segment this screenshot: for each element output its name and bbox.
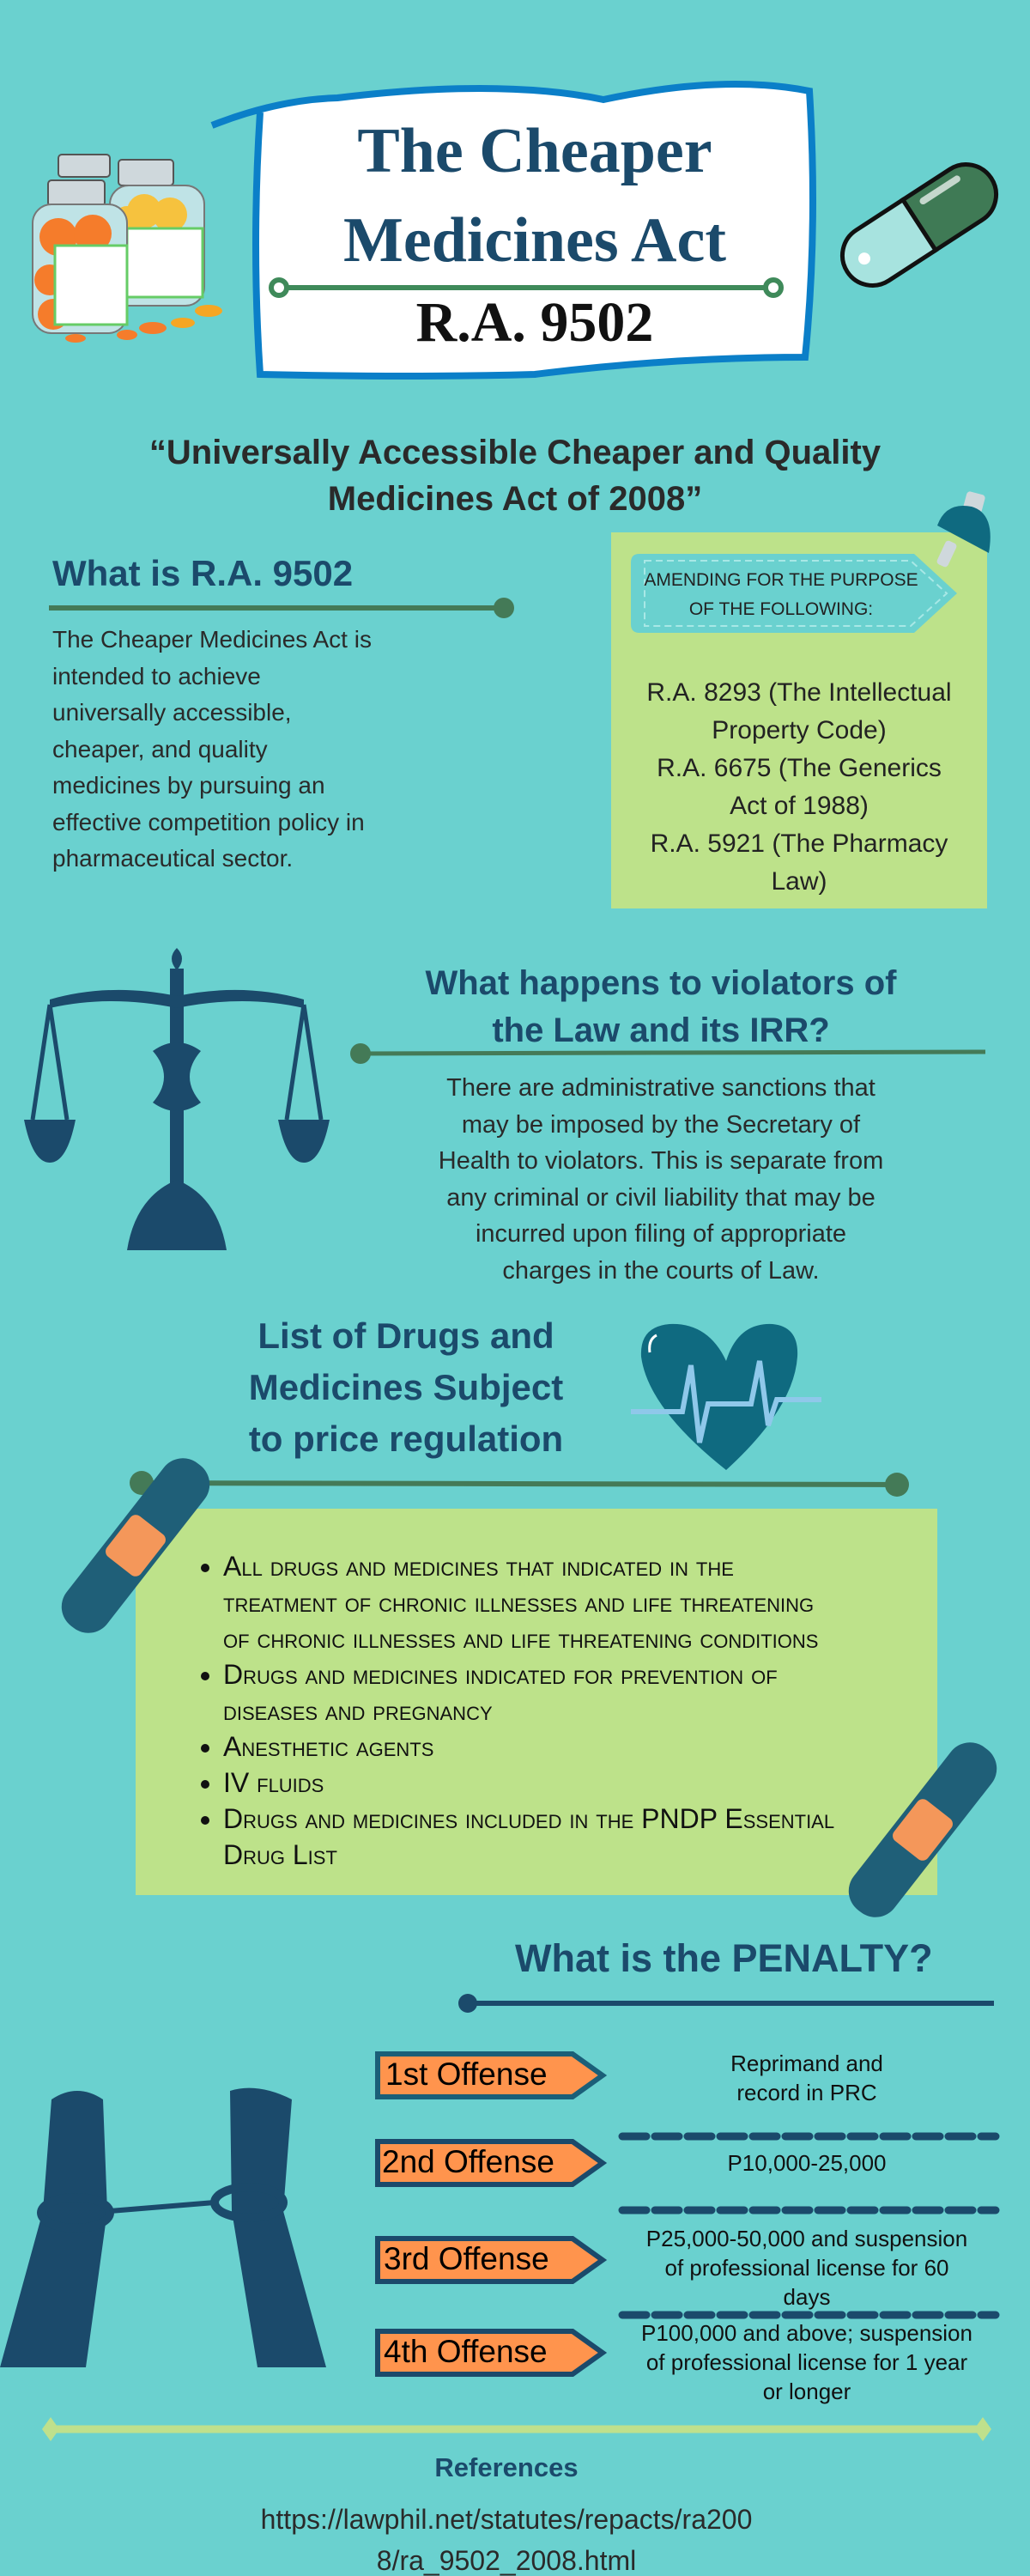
subtitle R.A. 9502: R.A. 9502 bbox=[416, 291, 653, 354]
bullet list: diseases and pregnancy bbox=[223, 1695, 493, 1726]
bullet list: Drugs and medicines indicated for prevention of bbox=[223, 1659, 778, 1690]
bullet list: of chronic illnesses and life threatening conditions bbox=[223, 1623, 818, 1654]
bullet list: All drugs and medicines that indicated in the bbox=[223, 1551, 734, 1582]
text block: sanctions: may be imposed by the Secretary of bbox=[462, 1111, 860, 1139]
text block: definition: intended to achieve bbox=[52, 663, 261, 689]
bottom divider bbox=[42, 2417, 991, 2441]
icon: bandage top bbox=[62, 1458, 209, 1633]
tag: 2nd bbox=[375, 2139, 607, 2187]
text block: sanctions: There are administrative sanctions that bbox=[446, 1074, 876, 1102]
penalty 3: of professional license for 60 bbox=[665, 2255, 948, 2281]
title text bbox=[343, 116, 726, 276]
heading: list of drugs: to price regulation bbox=[249, 1419, 563, 1459]
text block: definition: universally accessible, bbox=[52, 699, 292, 726]
bullet list: treatment of chronic illnesses and life threatening bbox=[223, 1587, 814, 1618]
quote heading: “Universally Accessible Cheaper and Quality bbox=[149, 434, 881, 471]
title text: The Cheaper bbox=[357, 116, 712, 186]
bullet list: Drugs and medicines included in the PNDP Essential bbox=[223, 1803, 834, 1834]
heading: violators: What happens to violators of bbox=[426, 964, 896, 1002]
list of laws: Law) bbox=[771, 867, 827, 896]
tag: 3rd: 3rd Offense bbox=[384, 2241, 549, 2276]
text block: definition: The Cheaper Medicines Act is bbox=[52, 626, 372, 653]
text block: sanctions: incurred upon filing of appropriate bbox=[476, 1220, 846, 1248]
reference url bbox=[261, 2504, 752, 2576]
panel: amending laws bbox=[611, 532, 987, 908]
heading: list of drugs: Medicines Subject bbox=[249, 1367, 563, 1407]
icon: capsule bbox=[839, 162, 999, 288]
list of laws bbox=[646, 678, 952, 896]
icon: bandage bottom bbox=[848, 1742, 997, 1917]
list of laws: R.A. 8293 (The Intellectual bbox=[646, 678, 952, 707]
tag: amending bbox=[631, 554, 957, 633]
tag: 2nd: 2nd Offense bbox=[382, 2144, 554, 2179]
divider with dot bbox=[49, 598, 514, 618]
penalty 3 bbox=[646, 2226, 967, 2310]
references heading: References bbox=[434, 2452, 579, 2482]
text block: definition: medicines by pursuing an bbox=[52, 772, 325, 799]
icon: scales of justice bbox=[24, 948, 330, 1250]
tag: 4th bbox=[375, 2329, 607, 2377]
penalty 4: of professional license for 1 year bbox=[646, 2349, 967, 2375]
list of laws: R.A. 6675 (The Generics bbox=[657, 754, 942, 782]
penalty 4: P100,000 and above; suspension bbox=[641, 2320, 972, 2346]
tag: 1st bbox=[375, 2051, 607, 2099]
penalty 4 bbox=[641, 2320, 972, 2404]
heading: violators bbox=[426, 964, 896, 1049]
heading: list of drugs: List of Drugs and bbox=[258, 1315, 554, 1356]
heading: list of drugs bbox=[249, 1315, 563, 1459]
divider with dot bbox=[350, 1043, 985, 1064]
tag: amending: AMENDING FOR THE PURPOSE bbox=[644, 570, 918, 590]
tag: 3rd bbox=[375, 2236, 607, 2284]
text block: sanctions: Health to violators. This is separate from bbox=[439, 1147, 883, 1175]
panel: drug list bbox=[136, 1509, 937, 1895]
list of laws: R.A. 5921 (The Pharmacy bbox=[651, 829, 948, 858]
bullet list: IV fluids bbox=[223, 1767, 324, 1798]
divider double dot bbox=[130, 1471, 909, 1497]
penalty 2: P10,000-25,000 bbox=[727, 2150, 887, 2176]
tag: amending: OF THE FOLLOWING: bbox=[689, 599, 873, 619]
list of laws: Property Code) bbox=[712, 716, 887, 744]
icon: medicine bottles bbox=[32, 154, 222, 343]
text block: sanctions: any criminal or civil liability that may be bbox=[446, 1183, 876, 1211]
title text: Medicines Act bbox=[343, 205, 726, 276]
bullet list bbox=[201, 1551, 834, 1870]
text block: definition: pharmaceutical sector. bbox=[52, 845, 293, 872]
penalty 3: P25,000-50,000 and suspension bbox=[646, 2226, 967, 2251]
divider with dot bbox=[458, 1994, 994, 2013]
penalty 4: or longer bbox=[763, 2379, 851, 2404]
heading: penalty: What is the PENALTY? bbox=[515, 1936, 933, 1980]
bullet list: Drug List bbox=[223, 1839, 337, 1870]
quote heading bbox=[149, 434, 881, 518]
heading: violators: the Law and its IRR? bbox=[492, 1012, 830, 1049]
text block: sanctions bbox=[439, 1074, 883, 1285]
title divider bbox=[269, 277, 784, 298]
tag: 1st: 1st Offense bbox=[385, 2057, 548, 2092]
bullet list: Anesthetic agents bbox=[223, 1731, 433, 1762]
text block: definition: cheaper, and quality bbox=[52, 735, 268, 762]
penalty 1: record in PRC bbox=[736, 2080, 877, 2105]
tag: 4th: 4th Offense bbox=[384, 2334, 548, 2369]
quote heading: Medicines Act of 2008” bbox=[328, 480, 702, 518]
offense tags bbox=[375, 2051, 607, 2377]
text block: definition: effective competition policy in bbox=[52, 809, 365, 835]
reference url: 8/ra_9502_2008.html bbox=[377, 2545, 636, 2576]
text block: sanctions: charges in the courts of Law. bbox=[502, 1257, 820, 1285]
penalty 3: days bbox=[784, 2284, 830, 2310]
reference url: https://lawphil.net/statutes/repacts/ra200 bbox=[261, 2504, 752, 2535]
list of laws: Act of 1988) bbox=[730, 792, 869, 820]
title box bbox=[211, 81, 816, 380]
penalty 1: Reprimand and bbox=[730, 2050, 883, 2076]
text block: definition bbox=[52, 626, 372, 872]
penalty 1 bbox=[730, 2050, 883, 2105]
icon: pushpin bbox=[937, 491, 991, 567]
heading: What is R.A. 9502: What is R.A. 9502 bbox=[52, 553, 353, 593]
icon: heart with heartbeat bbox=[631, 1324, 821, 1470]
icon: handcuffed hands bbox=[0, 2088, 326, 2367]
